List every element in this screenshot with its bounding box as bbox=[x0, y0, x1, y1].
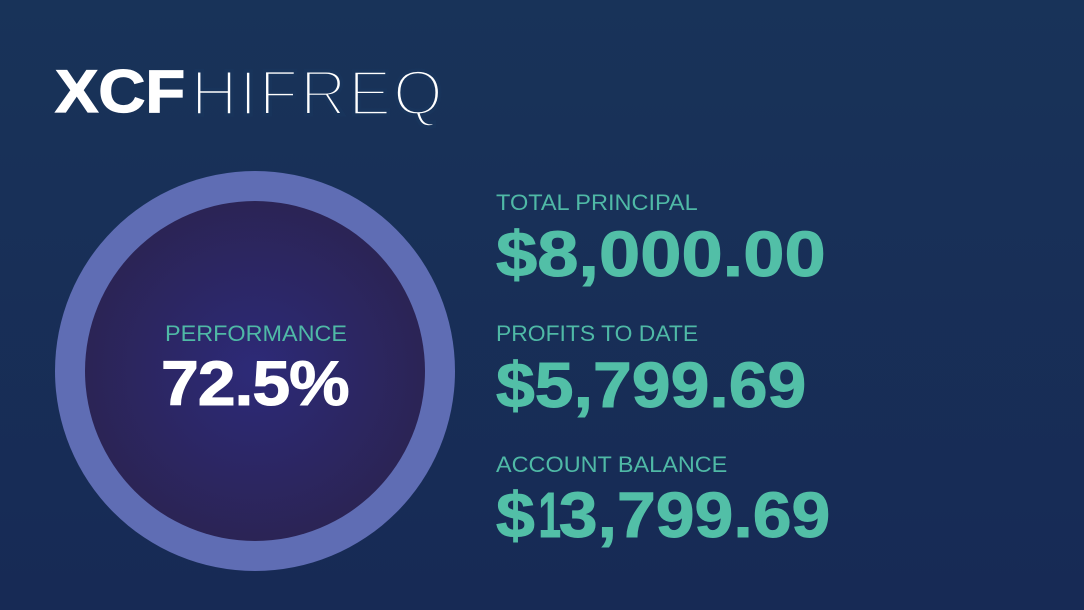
performance value: 72.5% bbox=[161, 349, 349, 419]
title thin part: HIFREQ bbox=[191, 56, 445, 128]
account balance label: ACCOUNT BALANCE bbox=[496, 452, 727, 477]
profits value: $5,799.69 bbox=[496, 349, 806, 421]
total principal value: $8,000.00 bbox=[496, 218, 826, 290]
performance ring bbox=[55, 171, 455, 571]
account balance value: 1 bbox=[538, 479, 561, 551]
title bbox=[54, 56, 445, 128]
title bold part: XCF bbox=[55, 58, 185, 125]
profits label: PROFITS TO DATE bbox=[496, 321, 698, 346]
total principal label: TOTAL PRINCIPAL bbox=[496, 190, 698, 215]
account balance value: $ 3,799.69 bbox=[496, 479, 830, 551]
performance label: PERFORMANCE bbox=[165, 321, 347, 346]
